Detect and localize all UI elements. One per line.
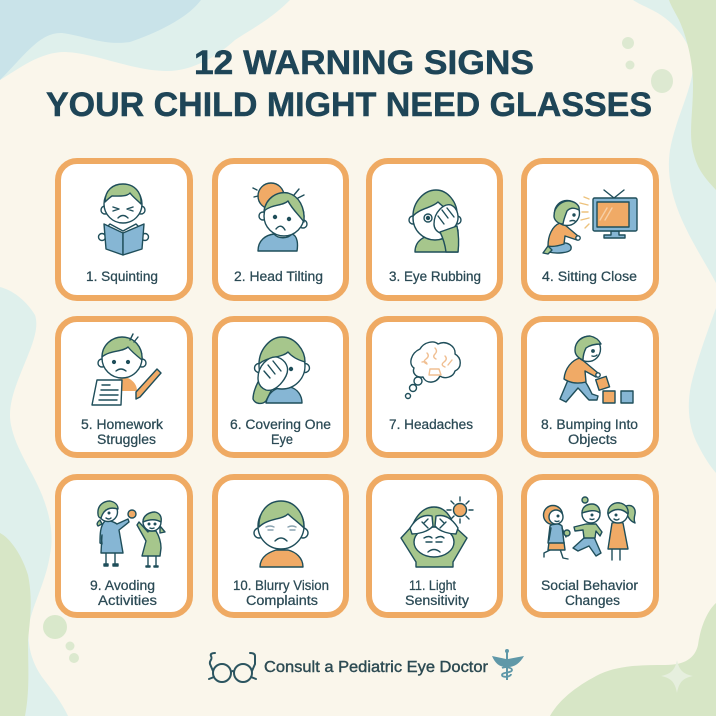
label: 7. Headaches: [389, 417, 473, 432]
panel: 5. Homework Struggles: [58, 319, 190, 455]
icon: child with blurry vision frown: [254, 501, 308, 567]
icon: child bumping into blocks: [560, 336, 633, 403]
icon: thought cloud with pain squiggles: [406, 342, 460, 398]
label: Sensitivity: [405, 593, 469, 608]
title: 12 WARNING SIGNS: [194, 44, 534, 82]
label: 10. Blurry Vision: [233, 578, 329, 593]
label: [230, 417, 331, 447]
panel: 4. Sitting Close: [524, 161, 656, 298]
panel: 11. Light Sensitivity: [369, 477, 500, 615]
label: Complaints: [246, 593, 318, 608]
panel: 10. Blurry Vision Complaints: [215, 477, 346, 615]
icon: child rubbing eye: [409, 190, 461, 252]
panel: 9. Avoiding Activities: [58, 477, 190, 615]
footer: call to action: [209, 649, 524, 682]
label: 1. Squinting: [86, 269, 158, 284]
callout text: Consult a Pediatric Eye Doctor: [264, 659, 489, 676]
title: [46, 44, 652, 124]
icon: two children with ball: [97, 501, 165, 567]
icon: child covering one eye: [253, 337, 310, 403]
label: 5. Homework: [81, 417, 163, 432]
label: Social Behavior: [541, 578, 639, 593]
label: 6. Covering One: [230, 417, 331, 432]
label: [541, 417, 638, 447]
label: 4. Sitting Close: [542, 269, 637, 284]
panel: 6. Covering One Eye: [215, 319, 346, 455]
icon: child with homework and pencil: [92, 334, 161, 405]
label: [81, 417, 163, 447]
label: Activities: [98, 593, 157, 608]
icon: three children playing: [544, 497, 635, 560]
icon: child shielding eyes from sun: [401, 497, 473, 567]
label: 9. Avoding: [90, 578, 155, 593]
label: [233, 578, 329, 608]
label: 8. Bumping Into: [541, 417, 638, 432]
icon: glasses: [209, 653, 256, 682]
icon: child squinting over book: [98, 184, 148, 255]
label: 2. Head Tilting: [234, 269, 323, 284]
label: [405, 578, 469, 608]
label: [90, 578, 157, 608]
label: Objects: [568, 432, 617, 447]
icon: child tilting head: [253, 183, 307, 251]
icon: caduceus: [492, 649, 524, 680]
panel: 8. Bumping Into Objects: [524, 319, 656, 455]
title: YOUR CHILD MIGHT NEED GLASSES: [46, 86, 652, 124]
panel: 1. Squinting: [58, 161, 190, 298]
label: Changes: [565, 593, 620, 608]
panel: Social Behavior Changes: [524, 477, 656, 615]
panel: 2. Head Tilting: [215, 161, 346, 298]
icon: child sitting close to TV: [543, 190, 637, 254]
panel: 3. Eye Rubbing: [369, 161, 500, 298]
label: 3. Eye Rubbing: [389, 269, 481, 284]
label: 11. Light: [409, 578, 456, 593]
label: Eye: [271, 432, 293, 447]
label: Struggles: [97, 432, 156, 447]
panel: 7. Headaches: [369, 319, 500, 455]
label: [541, 578, 639, 608]
